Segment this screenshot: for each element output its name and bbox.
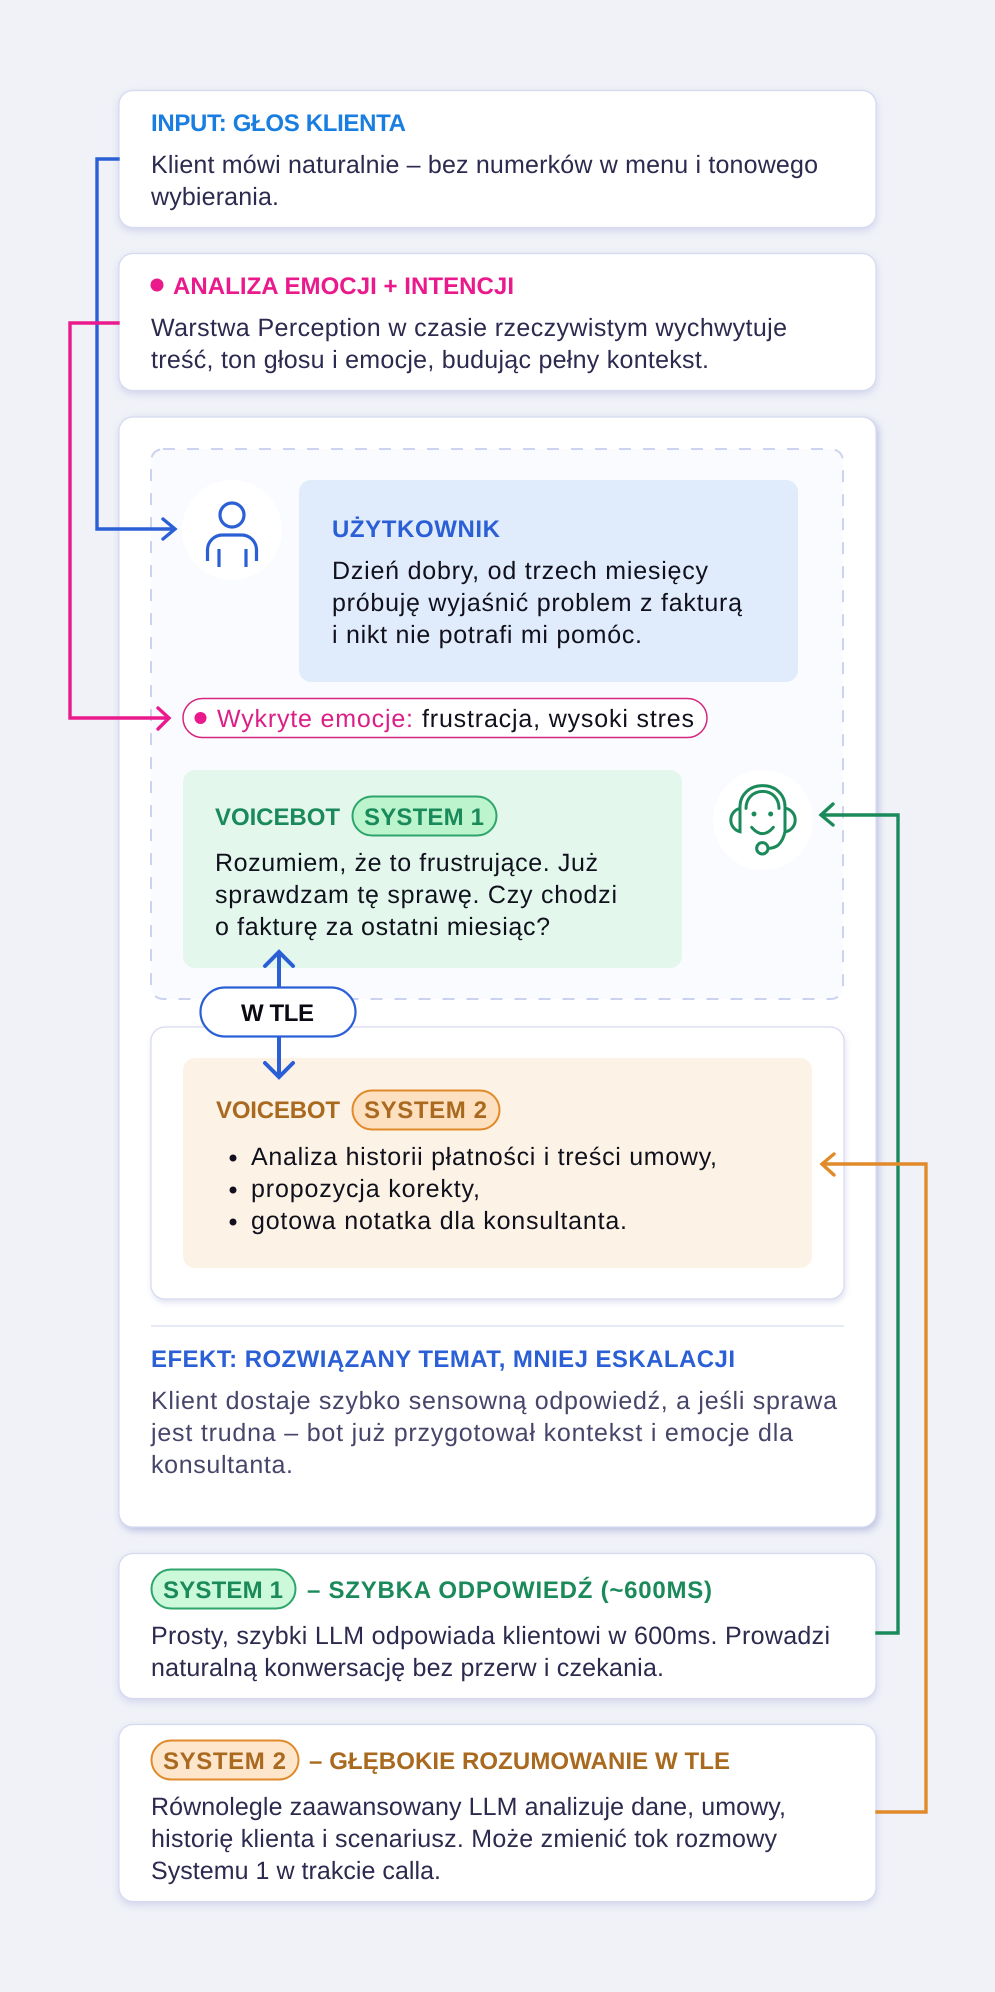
heading: input: INPUT: GŁOS KLIENTA bbox=[151, 110, 406, 137]
panel: background system 2 box bbox=[151, 1027, 844, 1299]
text block: system 1 description bbox=[151, 1622, 830, 1682]
heading: system 2: – GŁĘBOKIE ROZUMOWANIE W TLE bbox=[309, 1748, 730, 1775]
panel: system 1 card bbox=[119, 1554, 876, 1698]
heading: voicebot: VOICEBOT bbox=[215, 804, 340, 831]
text block: system 2 description: Równolegle zaawansowany LLM analizuje dane, umowy, bbox=[151, 1793, 786, 1821]
text block: voicebot reply: sprawdzam tę sprawę. Czy chodzi bbox=[215, 881, 617, 909]
text block: input description bbox=[150, 151, 818, 211]
heading: voicebot: VOICEBOT bbox=[216, 1097, 340, 1124]
text block: input description: Klient mówi naturalnie – bez numerków w menu i tonowego bbox=[151, 151, 818, 179]
text block: voicebot reply: o fakturę za ostatni miesiąc? bbox=[215, 913, 550, 941]
text block: user message: i nikt nie potrafi mi pomóc. bbox=[332, 621, 642, 649]
list: system 2 tasks: gotowa notatka dla konsultanta. bbox=[251, 1207, 627, 1235]
list: system 2 tasks bbox=[230, 1143, 717, 1235]
text block: user message: próbuję wyjaśnić problem z fakturą bbox=[332, 589, 742, 617]
text block: effect description: jest trudna – bot już przygotował kontekst i emocje dla bbox=[150, 1419, 793, 1447]
panel: user bubble bbox=[299, 480, 798, 682]
text block: user message bbox=[332, 557, 742, 649]
text block: effect description bbox=[150, 1387, 837, 1479]
icon: pink dot bbox=[150, 278, 164, 292]
text block: system 1 description: naturalną konwersację bez przerw i czekania. bbox=[151, 1654, 664, 1682]
icon: user bbox=[182, 480, 282, 580]
list: system 2 tasks: propozycja korekty, bbox=[251, 1175, 480, 1203]
icon: headset agent bbox=[713, 770, 813, 870]
text block: system 2 description: Systemu 1 w trakcie calla. bbox=[151, 1857, 441, 1885]
text block: user message: Dzień dobry, od trzech miesięcy bbox=[332, 557, 708, 585]
arrow: system 2 card to background box bbox=[822, 1154, 926, 1812]
panel: emotion analysis card bbox=[119, 254, 876, 390]
badge: system 1: SYSTEM 1 bbox=[163, 1577, 283, 1604]
callout: detected emotions bbox=[183, 698, 707, 738]
arrow: emotion analysis to detected emotions bbox=[70, 323, 169, 729]
callout: detected emotions: frustracja, wysoki stres bbox=[422, 705, 694, 733]
badge: system 1: SYSTEM 1 bbox=[364, 804, 484, 831]
list: system 2 tasks: Analiza historii płatności i treści umowy, bbox=[251, 1143, 717, 1171]
text block: effect description: Klient dostaje szybko sensowną odpowiedź, a jeśli sprawa bbox=[151, 1387, 837, 1415]
panel: voicebot system 2 bubble bbox=[183, 1058, 812, 1268]
text block: emotion description bbox=[151, 314, 787, 374]
text block: emotion description: Warstwa Perception w czasie rzeczywistym wychwytuje bbox=[151, 314, 787, 342]
text block: system 1 description: Prosty, szybki LLM odpowiada klientowi w 600ms. Prowadzi bbox=[151, 1622, 830, 1650]
text block: input description: wybierania. bbox=[150, 183, 279, 211]
panel: main conversation card bbox=[119, 417, 876, 1527]
callout: detected emotions: Wykryte emocje: bbox=[217, 705, 413, 733]
text block: effect description: konsultanta. bbox=[151, 1451, 293, 1479]
arrow: input to user bbox=[97, 159, 175, 539]
arrow: bidirectional system 1 and system 2 link bbox=[265, 952, 293, 1077]
effect divider and heading: EFEKT: ROZWIĄZANY TEMAT, MNIEJ ESKALACJI bbox=[151, 1346, 735, 1373]
panel: system 2 card bbox=[119, 1724, 876, 1902]
label: in background pill: W TLE bbox=[241, 1000, 314, 1027]
panel: dashed realtime conversation area bbox=[151, 449, 843, 999]
panel: voicebot system 1 bubble bbox=[183, 770, 682, 968]
badge: system 2: SYSTEM 2 bbox=[163, 1748, 286, 1775]
label: in background pill bbox=[200, 988, 356, 1036]
arrow: system 1 card to voicebot bbox=[821, 804, 898, 1633]
heading: user: UŻYTKOWNIK bbox=[332, 516, 501, 543]
badge: system 1 bbox=[352, 796, 496, 836]
badge: system 2 bbox=[152, 1740, 298, 1780]
heading: system 1: – SZYBKA ODPOWIEDŹ (~600MS) bbox=[307, 1576, 712, 1604]
text block: voicebot reply bbox=[215, 849, 617, 941]
text block: voicebot reply: Rozumiem, że to frustrujące. Już bbox=[215, 849, 598, 877]
text block: system 2 description bbox=[151, 1793, 786, 1885]
text block: emotion description: treść, ton głosu i emocje, budując pełny kontekst. bbox=[151, 346, 709, 374]
text block: system 2 description: historię klienta i scenariusz. Może zmienić tok rozmowy bbox=[151, 1825, 778, 1853]
heading: emotion analysis: ANALIZA EMOCJI + INTENCJI bbox=[173, 273, 514, 300]
badge: system 1 bbox=[152, 1570, 296, 1608]
badge: system 2: SYSTEM 2 bbox=[364, 1097, 487, 1124]
panel: input card bbox=[119, 90, 876, 228]
badge: system 2 bbox=[352, 1090, 500, 1130]
